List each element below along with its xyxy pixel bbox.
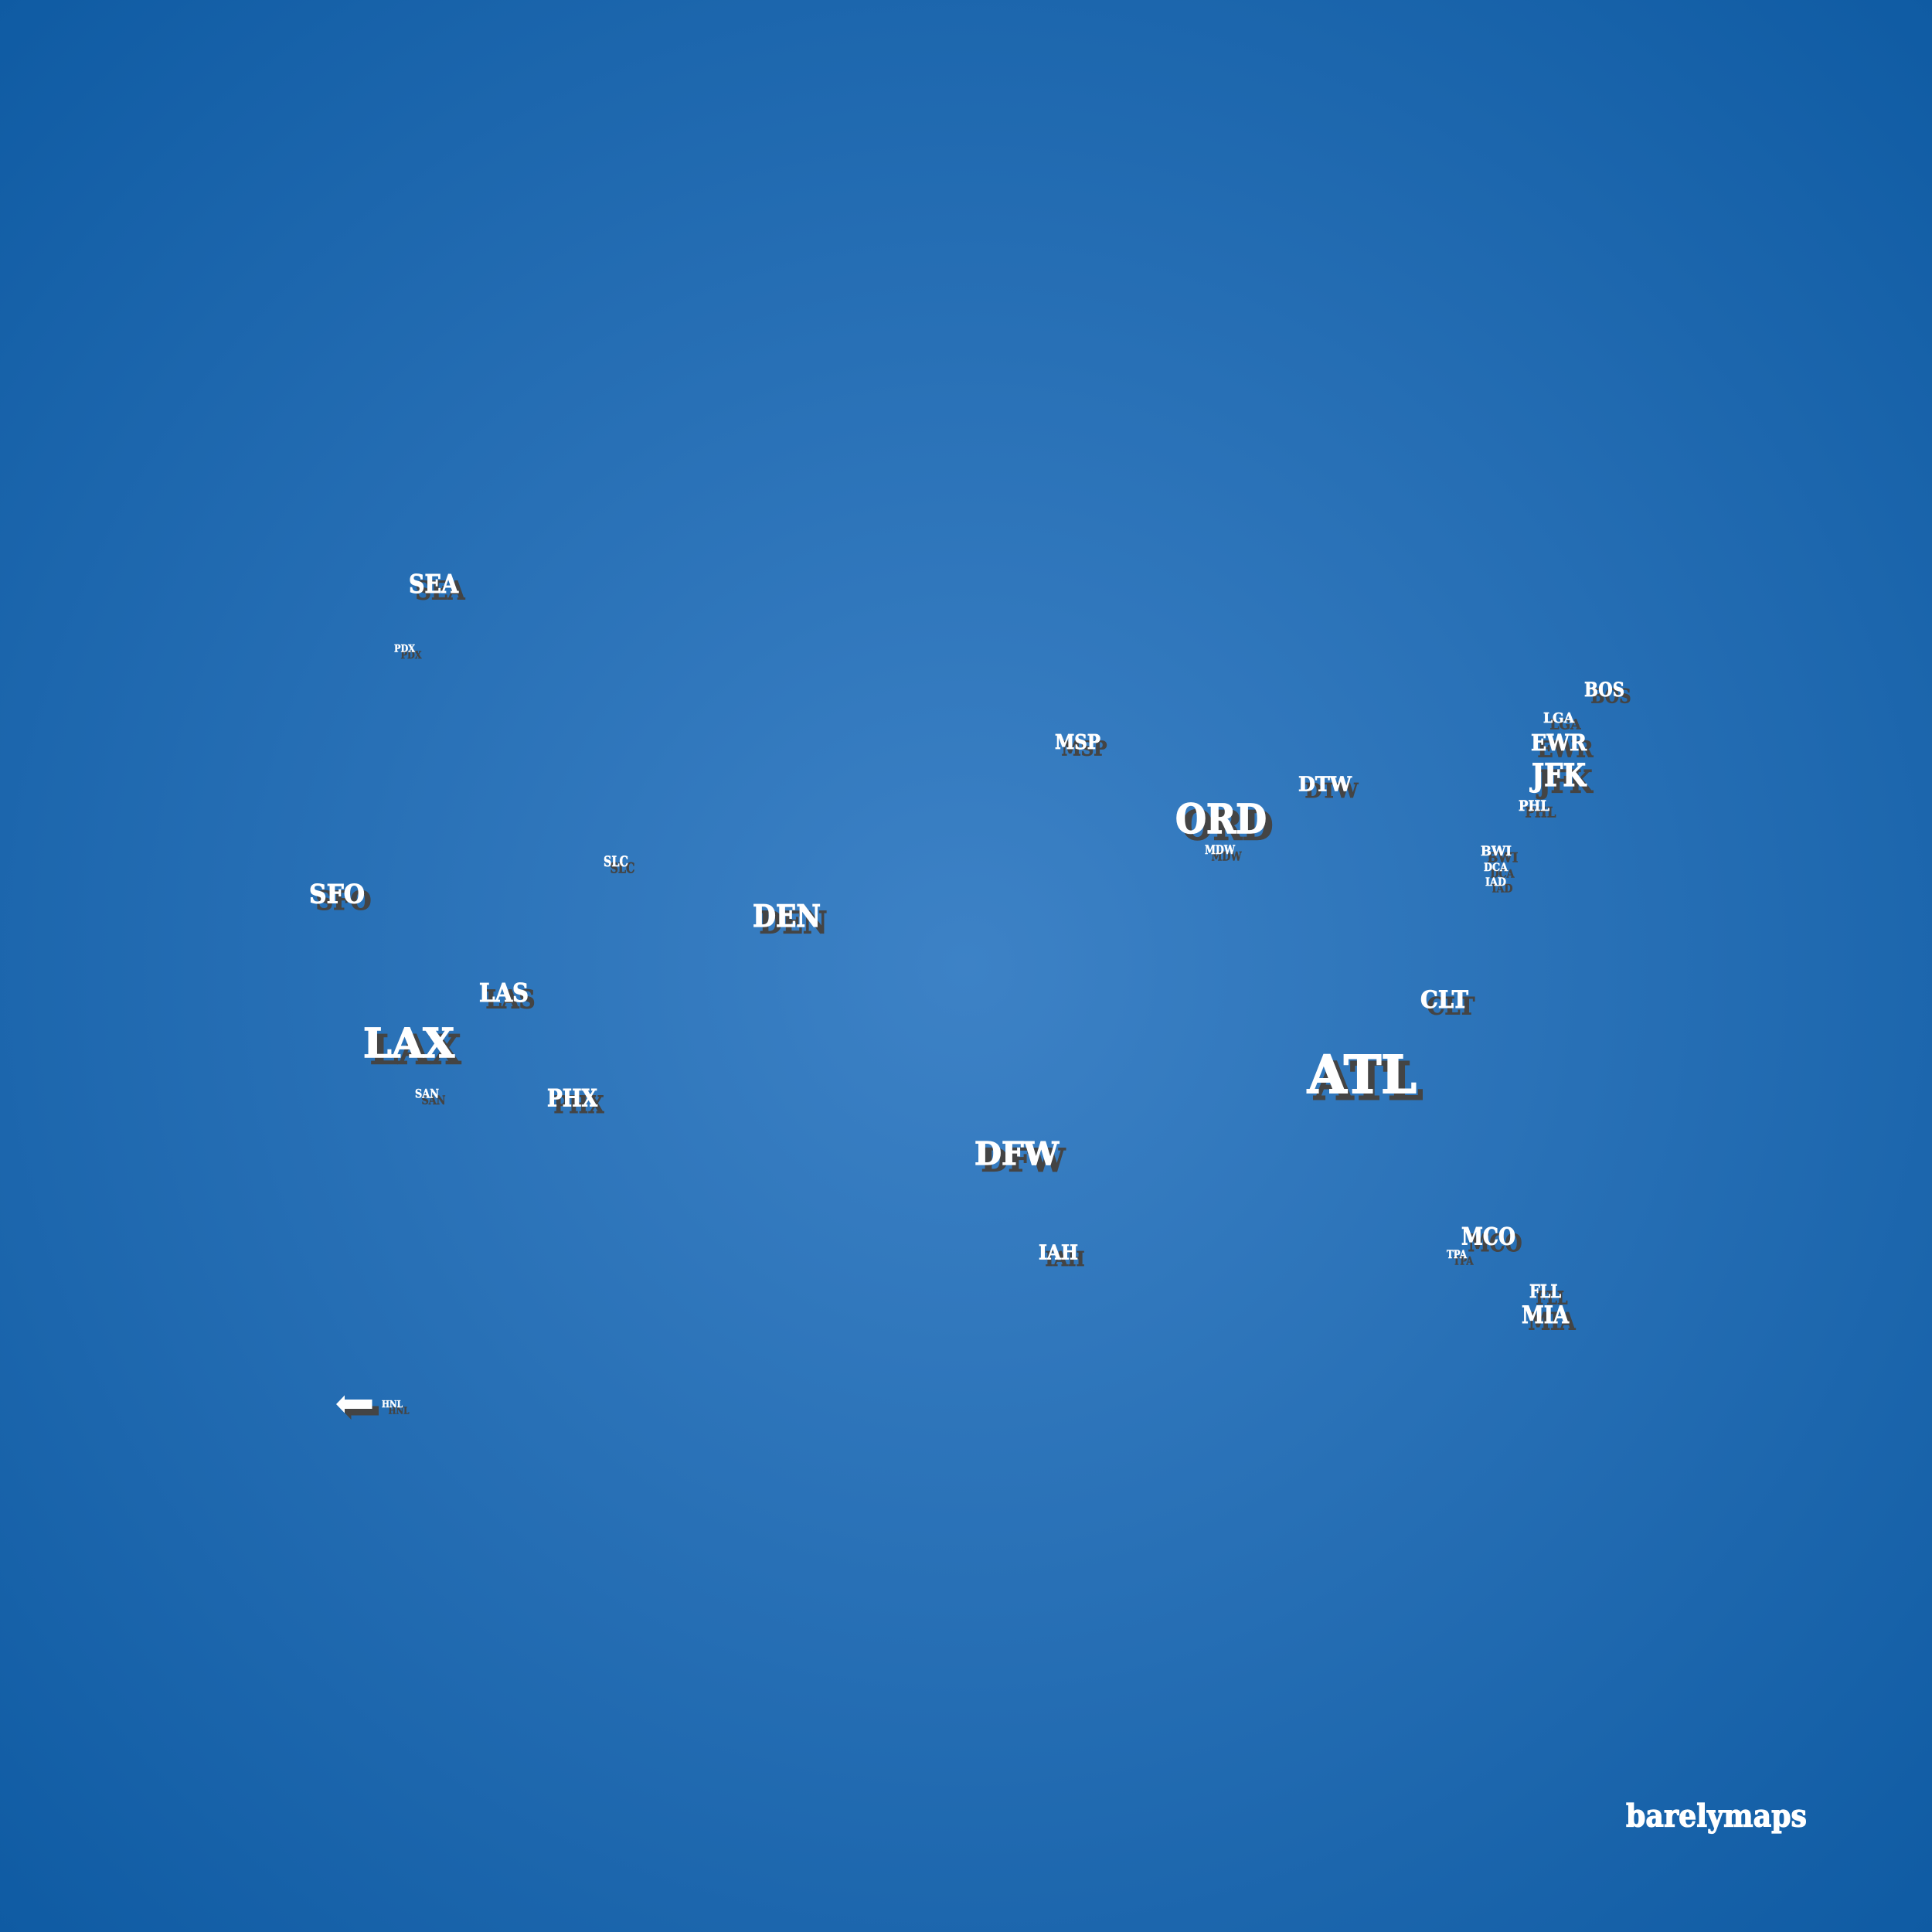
label: FLL: FLL (1529, 1281, 1561, 1302)
label: FLL: FLL (1536, 1287, 1567, 1309)
label: ATL: ATL (1307, 1044, 1417, 1105)
label: SAN: SAN (415, 1087, 439, 1100)
icon: arrow pointing to HNL (336, 1396, 379, 1420)
label: BOS: BOS (1584, 679, 1624, 701)
label: MSP: MSP (1055, 731, 1100, 754)
label: IAD (1485, 876, 1513, 895)
label: ORD: ORD (1182, 802, 1274, 850)
label: PHL: PHL (1519, 798, 1549, 815)
label: LGA (1543, 710, 1581, 733)
label: MIA: MIA (1529, 1308, 1576, 1335)
label: DCA: DCA (1484, 862, 1509, 874)
label: DCA (1484, 862, 1515, 881)
label: MCO: MCO (1461, 1223, 1515, 1250)
label: JFK: JFK (1536, 764, 1594, 801)
label: DEN: DEN (759, 906, 827, 941)
label: DCA: DCA (1490, 869, 1515, 881)
label: IAD: IAD (1485, 876, 1506, 889)
label: LAX: LAX (363, 1020, 455, 1067)
label: EWR: EWR (1538, 736, 1594, 762)
label: IAD: IAD (1492, 883, 1513, 895)
label: DFW: DFW (975, 1134, 1060, 1172)
label: SEA: SEA (416, 575, 465, 606)
label: SLC: SLC (604, 853, 628, 870)
label: PDX: PDX (400, 650, 422, 662)
label: PDX (394, 643, 422, 662)
label: SEA: SEA (409, 569, 459, 599)
label: PHL: PHL (1526, 804, 1556, 821)
label: SFO: SFO (315, 886, 371, 917)
label: TPA: TPA (1447, 1249, 1467, 1261)
label: MCO: MCO (1468, 1230, 1522, 1257)
label: DEN: DEN (753, 899, 821, 934)
label: TPA (1447, 1249, 1474, 1267)
label: IAH: IAH (1045, 1248, 1085, 1271)
label: MDW (1205, 842, 1242, 864)
label: BWI: BWI (1487, 850, 1518, 866)
label: ATL: ATL (1314, 1051, 1423, 1111)
label: SAN: SAN (422, 1093, 445, 1107)
label: SFO: SFO (309, 879, 365, 910)
label: CLT: CLT (1420, 986, 1468, 1014)
label: DFW: DFW (981, 1141, 1066, 1179)
label: LAX: LAX (369, 1026, 461, 1074)
label: JFK: JFK (1529, 757, 1587, 794)
label: LGA: LGA (1543, 710, 1575, 726)
label: MDW: MDW (1205, 842, 1235, 857)
logo: barelymaps: barelymaps (1626, 1798, 1807, 1835)
label: EWR: EWR (1531, 730, 1587, 756)
label: HNL: HNL (388, 1405, 410, 1416)
label: PHX: PHX (547, 1085, 597, 1113)
label: BWI (1481, 844, 1518, 866)
label: LAS: LAS (479, 978, 529, 1008)
label: BWI: BWI (1481, 844, 1512, 859)
label: BOS: BOS (1590, 685, 1631, 708)
label: HNL: HNL (382, 1398, 403, 1410)
label: IAH: IAH (1039, 1241, 1078, 1264)
label: PHL (1519, 798, 1556, 821)
label: LGA: LGA (1550, 717, 1581, 733)
label: SAN (415, 1087, 445, 1107)
label: CLT: CLT (1427, 992, 1475, 1020)
label: LAS: LAS (485, 985, 535, 1014)
label: MIA: MIA (1522, 1301, 1569, 1329)
label: MDW: MDW (1212, 849, 1242, 864)
label: PDX: PDX (394, 643, 416, 655)
label: TPA: TPA (1453, 1255, 1474, 1267)
label: DTW: DTW (1298, 773, 1352, 796)
label: MSP: MSP (1062, 737, 1107, 760)
label: HNL (382, 1398, 410, 1416)
label: DTW: DTW (1304, 780, 1359, 803)
label: ORD: ORD (1175, 796, 1267, 843)
label: PHX: PHX (553, 1091, 604, 1119)
label: SLC: SLC (611, 859, 635, 876)
